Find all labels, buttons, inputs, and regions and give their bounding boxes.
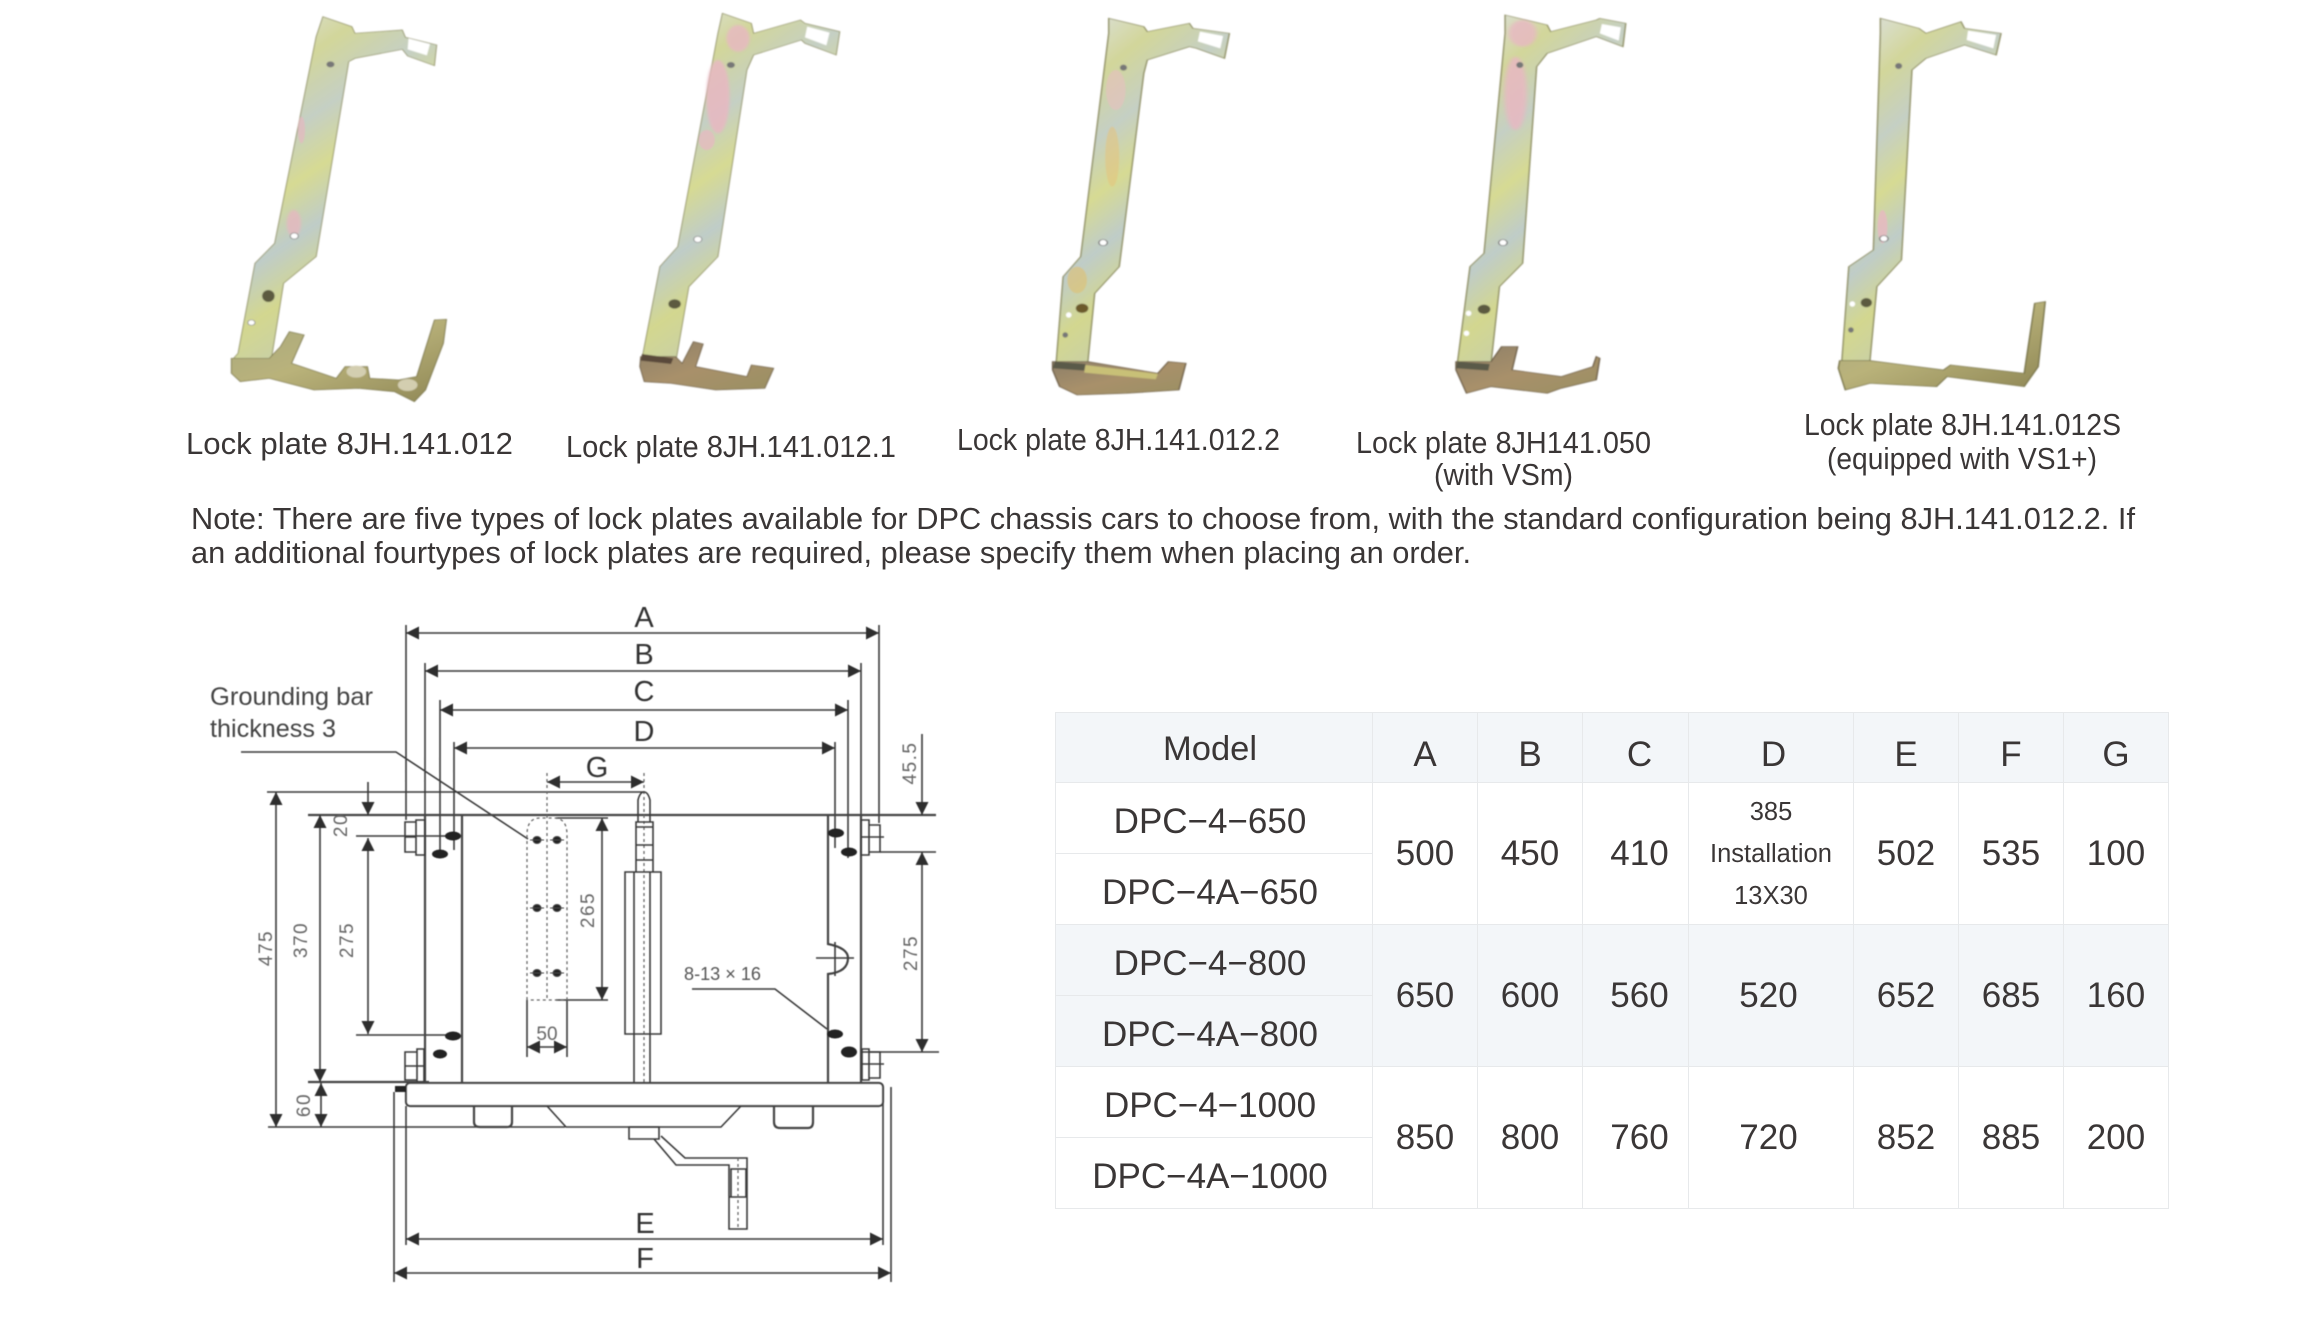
operating handle: [629, 1127, 747, 1229]
crossing lines at notch: [816, 942, 854, 976]
dimension arrow: E: E: [635, 1208, 655, 1240]
chassis body outline: [425, 815, 861, 1083]
dimension arrow: C: C: [634, 676, 654, 708]
dimension: 20: [331, 782, 368, 837]
base centre block: [547, 1106, 741, 1127]
icon: lock plate 8JH.141.012.1: [640, 13, 840, 390]
dimension table: 560: [1610, 976, 1669, 1014]
dimension table: 600: [1501, 976, 1559, 1014]
caption: lock plate 1: Lock plate 8JH.141.012: [186, 426, 513, 461]
dimension arrow: A: A: [634, 602, 654, 634]
racking screw assembly: [625, 792, 661, 1083]
dimension table: 685: [1982, 976, 2040, 1014]
icon: lock plate 8JH.141.012.2: [1053, 18, 1229, 395]
dimension table: DPC−4A−1000: [1092, 1156, 1328, 1196]
dimension table: 502: [1877, 834, 1935, 872]
dimension table: 160: [2087, 976, 2145, 1014]
icon: lock plate 8JH.141.012: [231, 17, 447, 402]
dimension arrow: G: [547, 752, 644, 784]
dimension table: B: [1518, 734, 1542, 774]
label: slot size: 8-13 × 16: [684, 964, 761, 984]
icon: lock plate 8JH.141.012S: [1838, 18, 2045, 390]
bottom left bolt: [405, 1049, 424, 1082]
dimension: 20: 20: [331, 813, 352, 837]
dimension: 50: 50: [536, 1024, 558, 1045]
top right bolt: [861, 820, 884, 855]
caption: lock plate 4 second line: (with VSm): [1434, 457, 1573, 492]
dimension arrow: D: D: [634, 716, 654, 748]
caption: lock plate 4: Lock plate 8JH141.050: [1356, 425, 1651, 460]
top left bolt: [405, 820, 425, 855]
drawing: extension lines: [241, 625, 939, 1282]
dimension arrow: G: G: [586, 752, 608, 784]
dimension table: 385: [1750, 798, 1792, 826]
dimension: 370: 370: [291, 922, 312, 958]
dimension table: DPC−4−800: [1114, 944, 1306, 982]
dimension table: C: [1627, 734, 1652, 774]
dimension table: F: [2000, 734, 2022, 774]
dimension table: 650: [1396, 976, 1454, 1014]
bottom right bolt: [862, 1049, 884, 1080]
dimension: 45.5: 45.5: [900, 742, 921, 784]
grounding bar holes: [530, 836, 564, 976]
label: grounding bar: thickness 3: [210, 715, 336, 743]
caption: lock plate 3: Lock plate 8JH.141.012.2: [957, 422, 1280, 457]
dimension arrow: F: F: [636, 1243, 654, 1275]
dimension table: 410: [1610, 834, 1669, 872]
dimension table: G: [2102, 734, 2130, 774]
dimension table: Installation: [1710, 840, 1832, 868]
label: grounding bar: Grounding bar: [210, 683, 373, 711]
dimension table: 100: [2087, 834, 2145, 872]
mounting holes: [432, 828, 857, 1058]
icon: lock plate 8JH141.050: [1456, 15, 1626, 393]
dimension table: 200: [2087, 1118, 2145, 1156]
base plate: [406, 1083, 883, 1106]
dimension table: 520: [1739, 976, 1798, 1014]
dimension: 265: 265: [578, 892, 599, 928]
dimension table: 885: [1982, 1118, 2040, 1156]
dimension table: 852: [1877, 1118, 1935, 1156]
dimension arrow: B: B: [634, 639, 654, 671]
dimension table: Model: [1163, 730, 1257, 768]
dimension: 60: [294, 1083, 321, 1127]
dimension table: 450: [1501, 834, 1559, 872]
base plate left tab: [395, 1086, 406, 1092]
drawing: top and bottom reference lines: [308, 815, 936, 1082]
label: grounding bar: [210, 683, 373, 743]
dimension: 275 left: 275: [337, 922, 358, 958]
dimension: 45.5: [900, 734, 922, 815]
note text: an additional fourtypes of lock plates are required, please specify them when placing an order.: [191, 535, 1471, 570]
dimension table: 720: [1739, 1118, 1798, 1156]
dimension drawing: [210, 602, 939, 1282]
caption: lock plate 5 second line: (equipped with VS1+): [1827, 441, 2097, 476]
dimension table: [1055, 712, 2169, 1209]
dimension table: DPC−4A−650: [1102, 872, 1318, 912]
grounding bar dashed outline: [527, 773, 644, 1083]
dimension: 275 right: 275: [901, 935, 922, 971]
note text: Note: There are five types of lock plates available for DPC chassis cars to choose from, with the standard configuration being 8JH.141.012.2. If: [191, 501, 2135, 536]
dimension table: 535: [1982, 834, 2040, 872]
handle centre line: [737, 1158, 739, 1229]
dimension table: D: [1761, 734, 1786, 774]
dimension table: 13X30: [1734, 882, 1808, 910]
dimension table: DPC−4−650: [1114, 802, 1306, 840]
dimension table: E: [1894, 734, 1918, 774]
dimension table: 760: [1610, 1118, 1669, 1156]
dimension table: 850: [1396, 1118, 1454, 1156]
dimension table: 500: [1396, 834, 1454, 872]
dimension table: 800: [1501, 1118, 1559, 1156]
base feet: [474, 1106, 813, 1128]
dimension: 50: [527, 1024, 567, 1047]
dimension: 475: 475: [256, 930, 277, 966]
dimension table: DPC−4−1000: [1104, 1086, 1316, 1124]
dimension table: DPC−4A−800: [1102, 1014, 1318, 1054]
caption: lock plate 2: Lock plate 8JH.141.012.1: [566, 429, 896, 464]
dimension: 60: 60: [294, 1093, 315, 1117]
note text: [191, 501, 2135, 570]
dimension table: 652: [1877, 976, 1935, 1014]
dimension table: A: [1413, 734, 1437, 774]
caption: lock plate 5: Lock plate 8JH.141.012S: [1804, 407, 2121, 442]
